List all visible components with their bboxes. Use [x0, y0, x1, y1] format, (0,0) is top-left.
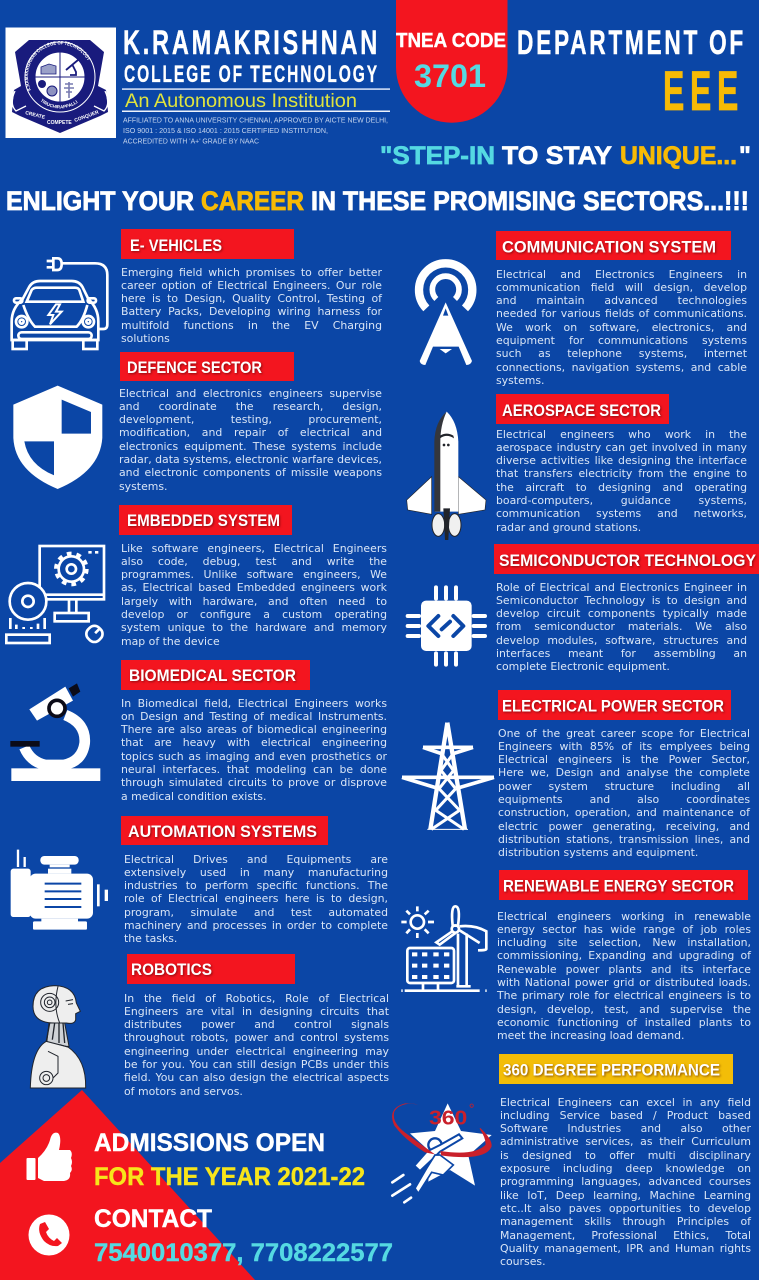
text: renewable energy sector: economic functioning of installed plants to	[497, 1016, 751, 1029]
college logo: CONQUER	[74, 109, 100, 124]
heading: aerospace sector: AEROSPACE SECTOR	[502, 402, 661, 420]
text: renewable energy sector: including site selection, New installation,	[497, 936, 751, 949]
text: defence sector: Electrical and electronics engineers supervise	[119, 386, 382, 400]
text: automation systems: machinery and processes in order to complete	[124, 919, 388, 932]
college name	[123, 24, 380, 88]
affiliation text: AFFILIATED TO ANNA UNIVERSITY CHENNAI, APPROVED BY AICTE NEW DELHI,	[123, 118, 388, 124]
text: communication system: needed for various fields of communications.	[496, 307, 747, 320]
text: embedded system: map of the device	[121, 635, 220, 648]
text: 360 degree performance: Electrical Engineers can excel in any field	[500, 1096, 751, 1108]
text: biomedical sector: In Biomedical field, Electrical Engineers works	[121, 696, 387, 710]
tagline	[380, 142, 751, 170]
text: aerospace sector	[496, 428, 747, 534]
text: defence sector: modification, and repair of electrical and	[119, 426, 382, 439]
red triangle	[0, 1090, 255, 1280]
text: automation systems: Electrical Drives and Equipments are	[124, 852, 388, 866]
heading: defence sector	[120, 352, 294, 381]
heading: e-vehicles	[121, 229, 294, 259]
tagline: UNIQUE...	[620, 142, 737, 170]
heading: 360 degree performance: 360 DEGREE PERFORMANCE	[503, 1062, 720, 1080]
heading: electrical power sector	[498, 690, 731, 720]
panel: robotics	[30, 954, 389, 1098]
text: aerospace sector: board-computers, guidance systems,	[496, 494, 747, 507]
text: aerospace sector: aerospace industry can get involved in many	[496, 441, 747, 454]
panel: e-vehicles	[10, 229, 382, 350]
text: electrical power sector: distribution stations, transmission lines, and	[498, 833, 750, 846]
panel: 360 degree performance	[385, 1054, 759, 1267]
admissions text: FOR THE YEAR 2021-22	[94, 1163, 365, 1191]
text: aerospace sector: that transfers electricity from the engine to	[496, 467, 747, 480]
panel: embedded system	[5, 505, 387, 648]
text: biomedical sector: through simulated circuits to prove or disprove	[121, 776, 387, 789]
heading: communication system: COMMUNICATION SYSTEM	[502, 238, 716, 256]
text: electrical power sector: Engineers with 85% of its emplyees being	[498, 740, 750, 753]
heading: aerospace sector	[496, 394, 669, 424]
text: communication system: equipment for communications systems	[496, 334, 747, 347]
main heading: ENLIGHT YOUR	[6, 186, 194, 216]
text: embedded system: as, Electrical based Embedded engineers work	[121, 581, 387, 594]
text: renewable energy sector: Renewable power plants and its interface	[497, 963, 751, 976]
text: robotics: Engineers are vital in designing circuits that	[124, 1005, 389, 1018]
autonomous institution line: An Autonomous Institution	[125, 90, 357, 112]
text: defence sector: and electronic components of missile weapons	[119, 466, 382, 479]
text: embedded system	[121, 542, 387, 648]
text: robotics: In the field of Robotics, Role of Electrical	[124, 992, 389, 1004]
text: defence sector: electronics equipment. These systems include	[119, 440, 382, 453]
text: renewable energy sector: meet the increasing load demand.	[497, 1029, 684, 1042]
icon: robot	[30, 985, 86, 1088]
text: embedded system: largely with hardware, and often need to	[121, 595, 387, 608]
icon: space shuttle	[406, 412, 486, 540]
icon: 360 star runner	[385, 1095, 500, 1210]
text: 360 degree performance: like IoT, Deep learning, Machine Learning	[500, 1189, 751, 1202]
text: semiconductor technology: Role of Electrical and Electronics Engineer in	[496, 580, 747, 594]
text: defence sector: and coordinate the research, design,	[119, 400, 382, 413]
text: robotics: throughout robots, power and control systems	[124, 1031, 389, 1044]
text: electrical power sector: electric power generating, receiving, and	[498, 820, 750, 833]
text: biomedical sector: There are also areas of biomedical engineering	[121, 723, 387, 736]
affiliation text	[123, 118, 388, 145]
heading: electrical power sector: ELECTRICAL POWER SECTOR	[502, 698, 724, 716]
text: e-vehicles: here is to Design, Quality Control, Testing of	[121, 292, 382, 305]
text: renewable energy sector	[497, 910, 751, 1043]
panel: automation systems	[10, 816, 388, 945]
text: automation systems	[124, 852, 388, 945]
text: robotics: field. You can also design the electrical aspects	[124, 1071, 389, 1084]
text: 360 degree performance: is designed to offer multi disciplinary	[500, 1149, 751, 1162]
panel: semiconductor technology	[406, 544, 759, 673]
heading: 360 degree performance	[499, 1054, 733, 1084]
text: 360 degree performance: programming languages, advanced courses	[500, 1175, 751, 1188]
text: renewable energy sector: The primary role for electrical engineers is to	[497, 989, 751, 1002]
contact text: CONTACT	[94, 1205, 212, 1233]
college name: COLLEGE OF TECHNOLOGY	[124, 61, 379, 88]
text: communication system: connections, navigation systems, and cable	[496, 361, 747, 374]
text: robotics: distributes power and control signals	[124, 1018, 389, 1031]
text: electrical power sector: distribution systems and equipment.	[498, 846, 698, 859]
contact text	[94, 1205, 393, 1267]
text: semiconductor technology: from semiconductor materials. We also	[496, 620, 747, 633]
text: communication system: systems.	[496, 374, 545, 387]
text: aerospace sector: communication systems and networks,	[496, 507, 747, 520]
heading: semiconductor technology	[494, 544, 759, 574]
text: renewable energy sector: commissioning, Expanding and upgrading of	[497, 949, 751, 962]
panel: communication system	[414, 231, 747, 387]
tagline: "	[739, 142, 751, 170]
text: renewable energy sector: design, develop, test, and supervise the	[497, 1003, 751, 1016]
TNEA code badge: 3701	[414, 58, 486, 94]
heading: embedded system: EMBEDDED SYSTEM	[127, 512, 280, 530]
department heading	[517, 24, 746, 122]
text: defence sector	[119, 386, 382, 493]
text: embedded system: develop or configure a custom operating	[121, 608, 387, 621]
heading: biomedical sector	[121, 660, 310, 690]
text: 360 degree performance: including Service based / Product based	[500, 1109, 751, 1122]
text: 360 degree performance	[500, 1096, 751, 1269]
affiliation text: ACCREDITED WITH 'A+' GRADE BY NAAC	[123, 138, 259, 145]
text: biomedical sector: on Design and Testing of medical Instruments.	[121, 710, 387, 723]
icon: phone	[28, 1214, 70, 1256]
college logo: COMPETE	[47, 120, 72, 126]
text: communication system: We work on software, electronics, and	[496, 321, 747, 334]
icon: microscope	[10, 683, 100, 781]
icon: microchip	[406, 585, 487, 667]
text: defence sector: systems.	[119, 480, 168, 493]
text: 360 degree performance: management skills through Principles of	[500, 1215, 751, 1228]
TNEA code badge	[396, 0, 508, 123]
heading: renewable energy sector: RENEWABLE ENERGY SECTOR	[503, 878, 734, 896]
text: communication system: and maintain advanced technologies	[496, 294, 747, 307]
text: e-vehicles: Battery Packs, Developing wiring harness for	[121, 305, 382, 318]
text: semiconductor technology: interfaces meant for assembling an	[496, 647, 747, 660]
text: renewable energy sector: Electrical engineers working in renewable	[497, 910, 751, 922]
text: embedded system: system unique to the hardware and memory	[121, 621, 387, 634]
text: electrical power sector: Electrical engineers is the Power Sector,	[498, 753, 750, 766]
text: electrical power sector: construction, operation, and maintenance of	[498, 806, 750, 819]
text: aerospace sector: radar and ground stations.	[496, 521, 641, 534]
text: biomedical sector: that are heavy with electrical engineering	[121, 736, 387, 749]
text: communication system: communication field will design, develop	[496, 281, 747, 294]
text: electrical power sector: equipments and also coordinates	[498, 793, 750, 806]
tagline: TO STAY	[502, 142, 612, 170]
text: e-vehicles: career option of Electrical Engineers. Our role	[121, 279, 382, 292]
tagline: "STEP-IN	[380, 142, 495, 170]
text: electrical power sector: Here we, Design and analyse the complete	[498, 766, 750, 779]
college name: K.RAMAKRISHNAN	[123, 24, 380, 62]
text: robotics: engineering under electrical engineering may	[124, 1045, 389, 1058]
panel: electrical power sector	[402, 690, 750, 859]
text: biomedical sector: neural interfaces. that modeling can be done	[121, 763, 387, 776]
text: semiconductor technology: Semiconductor Technology is to design and	[496, 594, 747, 607]
heading: automation systems: AUTOMATION SYSTEMS	[128, 823, 317, 841]
text: 360 degree performance: administrative services, as their Curriculum	[500, 1135, 751, 1148]
college logo	[6, 28, 116, 138]
text: defence sector: radar, data systems, electronic warfare devices,	[119, 453, 382, 466]
text: e-vehicles: multifold functions in the EV Charging	[121, 319, 382, 332]
text: communication system: such as telephone systems, internet	[496, 347, 747, 360]
text: aerospace sector: the aircraft to designing and operating	[496, 481, 747, 494]
heading: automation systems	[121, 816, 328, 845]
text: 360 degree performance: Software Industries and also other	[500, 1122, 751, 1135]
text: automation systems: the tasks.	[124, 932, 177, 945]
text: defence sector: development, testing, procurement,	[119, 413, 382, 426]
text: 360 degree performance: Management, Professional Ethics, Total	[500, 1229, 751, 1242]
text: e-vehicles: Emerging field which promises to offer better	[121, 266, 382, 278]
affiliation text: ISO 9001 : 2015 & ISO 14001 : 2015 CERTIFIED INSTITUTION,	[123, 128, 328, 135]
main heading	[6, 186, 749, 216]
heading: embedded system	[119, 505, 292, 535]
admissions text: ADMISSIONS OPEN	[94, 1129, 325, 1157]
college logo: TIRUCHIRAPPALLI	[41, 98, 78, 108]
icon: 360 star runner: 360	[429, 1107, 467, 1129]
icon: electric motor	[10, 850, 108, 930]
panel: renewable energy sector	[385, 870, 759, 1042]
college logo: K.RAMAKRISHNAN COLLEGE OF TECHNOLOGY	[24, 41, 91, 91]
heading: biomedical sector: BIOMEDICAL SECTOR	[129, 667, 296, 685]
text: semiconductor technology: develop modules, software, structures and	[496, 634, 747, 647]
text: robotics: be for you. You can still design PCBs under this	[124, 1058, 389, 1071]
text: e-vehicles	[121, 266, 382, 345]
text: aerospace sector: Electrical engineers who work in the	[496, 428, 747, 440]
text: embedded system: also code, debug, test and write the	[121, 555, 387, 568]
icon: shield	[13, 386, 102, 489]
text: automation systems: industries to perform specific functions. The	[124, 879, 388, 892]
text: communication system	[496, 268, 747, 387]
text: embedded system: programmes. Unlike software engineers, We	[121, 568, 387, 581]
text: electrical power sector: power system structure including all	[498, 780, 750, 793]
main heading: CAREER	[201, 186, 304, 216]
text: automation systems: extensively used in many manufacturing	[124, 866, 388, 879]
college logo: CREATE	[25, 110, 46, 121]
text: semiconductor technology	[496, 580, 747, 673]
contact text: 7540010377, 7708222577	[94, 1239, 393, 1267]
text: 360 degree performance: exposure including deep knowledge on	[500, 1162, 751, 1175]
icon: electric car	[10, 257, 109, 350]
text: biomedical sector	[120, 696, 387, 803]
text: automation systems: program, simulate and test automated	[124, 906, 388, 919]
text: biomedical sector: a medical condition exists.	[121, 790, 266, 803]
heading: communication system	[496, 231, 731, 260]
admissions text	[94, 1129, 365, 1191]
text: renewable energy sector: energy sector has wide range of job roles	[497, 923, 751, 936]
icon: solar panel and wind turbine	[398, 903, 490, 993]
heading: defence sector: DEFENCE SECTOR	[127, 359, 262, 377]
text: robotics	[124, 992, 389, 1098]
heading: robotics: ROBOTICS	[131, 961, 212, 979]
text: 360 degree performance: etc..It also paves opportunities to develop	[500, 1202, 751, 1215]
icon: thumbs up	[26, 1133, 72, 1181]
text: 360 degree performance: courses.	[500, 1255, 546, 1268]
panel: aerospace sector	[406, 394, 747, 540]
text: renewable energy sector: with National power grid or distributed loads.	[497, 976, 751, 989]
heading: e-vehicles: E- VEHICLES	[130, 237, 222, 255]
icon: signal tower	[414, 259, 476, 365]
panel: defence sector	[13, 352, 382, 493]
text: aerospace sector: diverse activities like designing the interface	[496, 454, 747, 467]
text: semiconductor technology: complete Electronic equipment.	[496, 660, 670, 673]
text: communication system: Electrical and Electronics Engineers in	[496, 268, 747, 280]
TNEA code badge: TNEA CODE	[396, 30, 506, 52]
text: e-vehicles: solutions	[121, 332, 170, 345]
text: electrical power sector: One of the great career scope for Electrical	[498, 726, 750, 740]
text: embedded system: Like software engineers, Electrical Engineers	[121, 542, 387, 554]
panel: biomedical sector	[10, 660, 387, 803]
icon: embedded computer	[5, 544, 106, 644]
footer: admissions and contact	[0, 1085, 400, 1280]
text: 360 degree performance: Quality management, IPR and Human rights	[500, 1242, 751, 1255]
icon: transmission pylon	[398, 720, 498, 832]
text: electrical power sector	[498, 726, 750, 860]
heading: renewable energy sector	[499, 870, 748, 900]
header	[6, 0, 751, 216]
text: automation systems: role of Electrical engineers here is to design,	[124, 892, 388, 905]
text: semiconductor technology: develop circuit components typically made	[496, 607, 747, 620]
text: biomedical sector: topics such as imaging and even prosthetics or	[121, 750, 387, 763]
heading: robotics	[127, 954, 295, 984]
text: robotics: of motors and servos.	[124, 1085, 243, 1098]
